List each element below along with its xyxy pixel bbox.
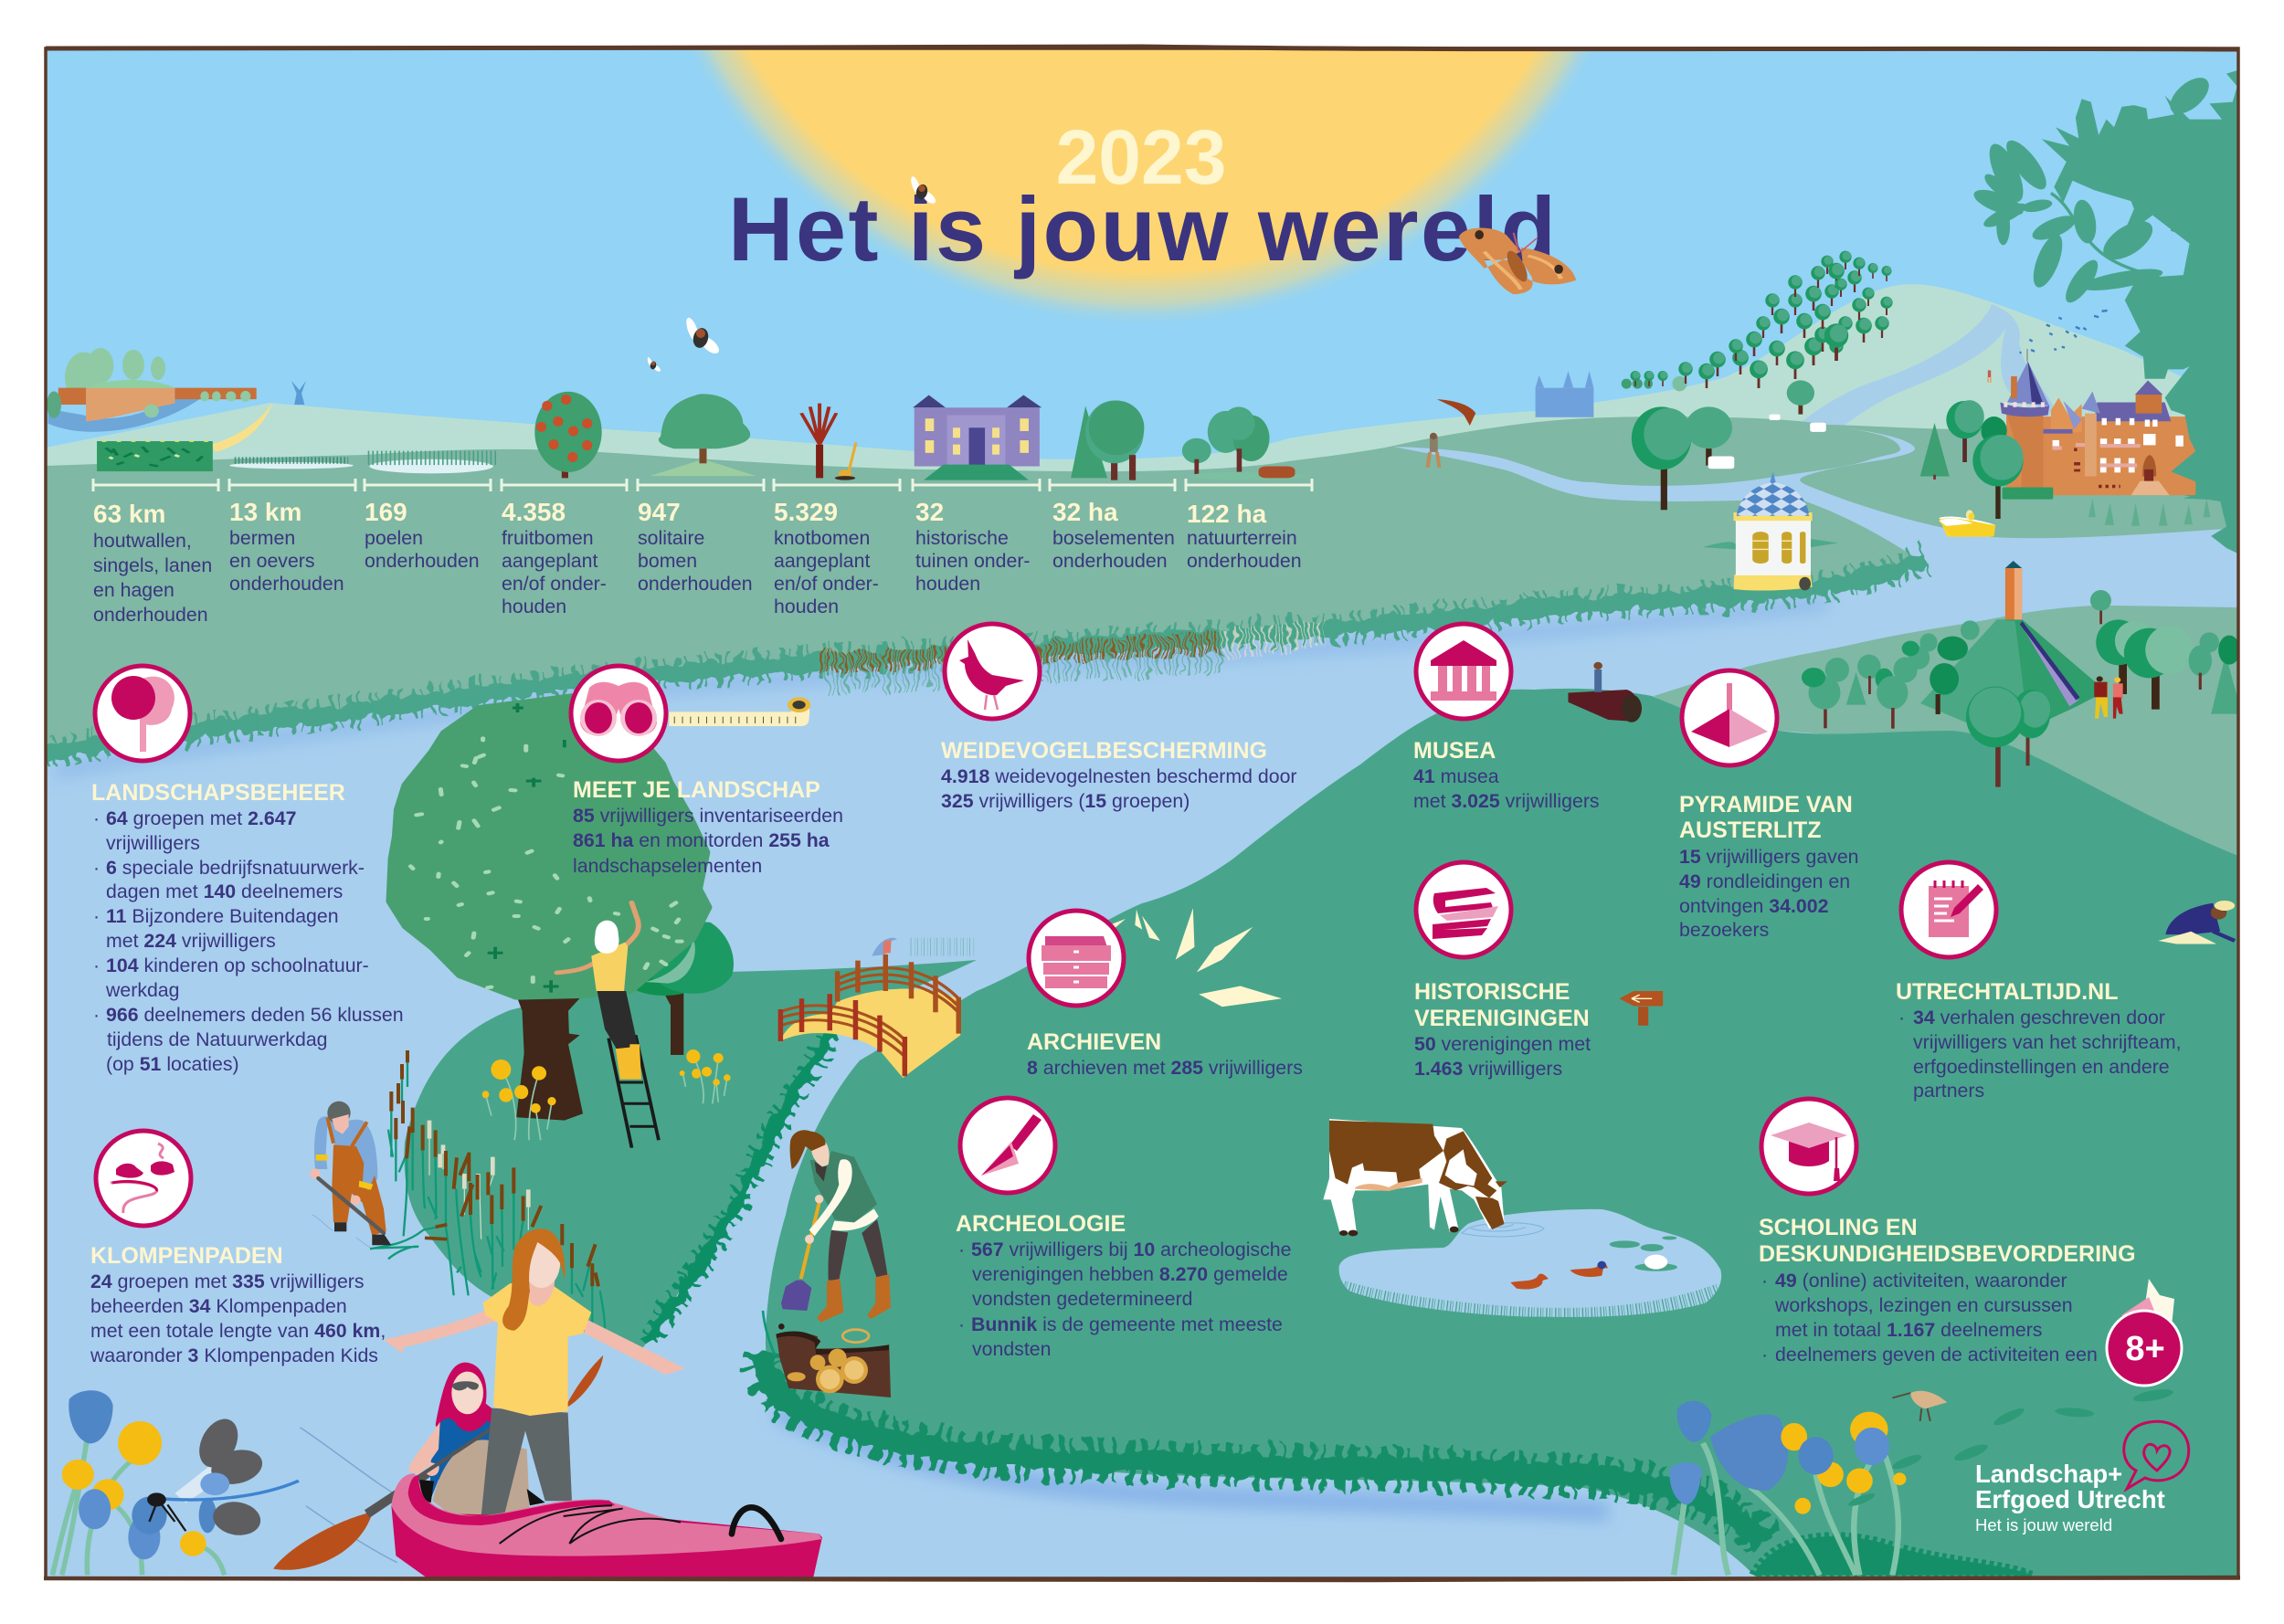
text: scholing: DESKUNDIGHEIDSBEVORDERING: [1759, 1241, 2136, 1267]
stat: bermen: 13 km: [229, 498, 301, 526]
standing kayaker: [384, 1229, 685, 1516]
text: historische verenigingen: 50 verenigingen met: [1414, 1033, 1591, 1055]
wader: [310, 1102, 447, 1259]
text: landschapsbeheer: 11 Bijzondere Buitendagen: [106, 905, 339, 927]
stat: houtwallen: singels, lanen: [93, 554, 212, 576]
text: scholing: 49 (online) activiteiten, waaronder: [1775, 1270, 2067, 1292]
kayak: [391, 1473, 822, 1578]
text: landschapsbeheer: 64 groepen met 2.647: [106, 807, 296, 829]
left flowers: [52, 1390, 225, 1575]
text: weidevogelbescherming: WEIDEVOGELBESCHERMING: [941, 738, 1267, 764]
stat: solitaire bomen: [638, 498, 753, 595]
text: utrechtaltijd: vrijwilligers van het schrijfteam,: [1913, 1031, 2182, 1053]
paddle: [273, 1355, 603, 1570]
stat: boselementen: [1052, 498, 1175, 572]
stat: knotbomen: aangeplant: [774, 550, 870, 572]
front meadow: [46, 417, 1929, 758]
stat: solitaire bomen: solitaire: [638, 527, 704, 549]
icon: clogs: [96, 1131, 191, 1226]
text: utrechtaltijd: ·: [1898, 1007, 1905, 1028]
bank hedge: [46, 559, 1926, 754]
text: utrechtaltijd: [1896, 979, 2182, 1102]
text: pyramide: PYRAMIDE VAN: [1679, 792, 1853, 817]
sky: [48, 49, 2236, 459]
meadow trees: [1632, 406, 1732, 510]
stat: bermen: onderhouden: [229, 573, 344, 595]
text: archeologie: verenigingen hebben 8.270 gemelde: [972, 1263, 1288, 1285]
stat: fruitbomen: aangeplant: [502, 550, 597, 572]
text: meet je landschap: 861 ha en monitorden 255 ha: [573, 829, 830, 851]
text: landschapsbeheer: met 224 vrijwilligers: [106, 930, 276, 952]
stat: solitaire bomen: 947: [638, 498, 681, 526]
trees near castle: [1920, 400, 2053, 519]
path: [211, 403, 272, 452]
fruit tree: [534, 392, 602, 478]
icon: mortarboard: [1761, 1099, 1856, 1194]
windmill: [291, 381, 306, 405]
right flowers: [1670, 1401, 1906, 1575]
foliage over castle: [2171, 382, 2247, 501]
text: landschapsbeheer: dagen met 140 deelnemers: [106, 881, 343, 902]
text: historische verenigingen: 1.463 vrijwilligers: [1414, 1058, 1562, 1080]
text: klompenpaden: KLOMPENPADEN: [90, 1243, 283, 1269]
shorebird: [1892, 1391, 1947, 1421]
text: meet je landschap: 85 vrijwilligers inventariseerden: [573, 805, 843, 827]
text: pyramide: AUSTERLITZ: [1679, 817, 1822, 843]
river branch: [1394, 431, 1929, 563]
big foliage silhouette: [1971, 68, 2247, 558]
big land: [766, 689, 2238, 1580]
stat: historische tuinen: historische: [915, 527, 1009, 549]
icon: pyramid: [1682, 670, 1777, 765]
icon: trowel: [960, 1098, 1055, 1193]
stat: boselementen: 32 ha: [1052, 498, 1118, 526]
text: pyramide: 15 vrijwilligers gaven: [1679, 846, 1859, 868]
text: klompenpaden: waaronder 3 Klompenpaden Kids: [90, 1345, 378, 1366]
poelen verge: [229, 460, 354, 469]
stat rulers: [93, 479, 1312, 491]
stat: knotbomen: knotbomen: [774, 527, 870, 549]
stat: houtwallen: onderhouden: [93, 604, 208, 626]
icon: landschapsbeheer tree: [95, 666, 190, 761]
archaeologist: [781, 1130, 891, 1323]
text: pyramide: 49 rondleidingen en: [1679, 870, 1850, 892]
text: archeologie: 567 vrijwilligers bij 10 archeologische: [971, 1239, 1291, 1260]
stat: boselementen: boselementen: [1052, 527, 1175, 549]
pyramid hill: [1654, 606, 2238, 863]
fort: [47, 348, 257, 432]
text: historische verenigingen: [1414, 979, 1591, 1080]
kneeling gardener: [2158, 901, 2235, 944]
stat: historische tuinen: 32: [915, 498, 944, 526]
text: utrechtaltijd: partners: [1913, 1080, 1984, 1102]
solitary tree: [650, 394, 756, 476]
stat: natuurterrein: [1187, 500, 1302, 572]
text: archeologie: vondsten: [972, 1338, 1051, 1360]
pond reeds: [368, 458, 497, 473]
text: historische verenigingen: HISTORISCHE: [1414, 979, 1570, 1005]
text: landschapsbeheer: werkdag: [105, 979, 179, 1001]
stat: houtwallen: houtwallen,: [93, 530, 192, 552]
stat: houtwallen: en hagen: [93, 579, 174, 601]
icon: books: [1416, 862, 1511, 957]
stat: knotbomen: [774, 498, 879, 617]
stat: knotbomen: houden: [774, 596, 839, 617]
text: archeologie: [956, 1211, 1291, 1360]
stat: boselementen: onderhouden: [1052, 550, 1168, 572]
bos trees: [1071, 400, 1144, 480]
text: weidevogelbescherming: 325 vrijwilligers (15 groepen): [941, 790, 1190, 812]
sun: [695, 49, 1588, 320]
text: scholing: workshops, lezingen en cursussen: [1774, 1294, 2073, 1316]
title: [728, 114, 1556, 279]
text: landschapsbeheer: tijdens de Natuurwerkdag: [107, 1028, 328, 1050]
signpost: [1619, 991, 1663, 1026]
knotted tree: [801, 404, 856, 480]
light hills: [48, 284, 2185, 471]
big tree: [391, 697, 976, 1148]
bottom bush: [1754, 1536, 2031, 1575]
text: weidevogelbescherming: 4.918 weidevogelnesten beschermd door: [941, 765, 1297, 787]
text: meet je landschap: [573, 777, 843, 877]
text: musea: 41 musea: [1413, 765, 1499, 787]
stat: knotbomen: 5.329: [774, 498, 838, 526]
icon: notepad: [1901, 862, 1996, 957]
rating badge 8+: 8+: [2125, 1330, 2165, 1368]
text: scholing: met in totaal 1.167 deelnemers: [1775, 1319, 2042, 1341]
text: historische verenigingen: VERENIGINGEN: [1414, 1006, 1590, 1031]
stat: fruitbomen: houden: [502, 596, 566, 617]
soil and coins: [763, 1311, 891, 1397]
text: landschapsbeheer: (op 51 locaties): [106, 1053, 239, 1075]
text: archieven: [1027, 1029, 1303, 1079]
text: meet je landschap: MEET JE LANDSCHAP: [573, 777, 820, 803]
poplars: [2088, 499, 2210, 526]
text: archeologie: Bunnik is de gemeente met meeste: [971, 1313, 1283, 1335]
text: klompenpaden: met een totale lengte van 460 km,: [90, 1320, 386, 1342]
bees in sky: [647, 316, 722, 373]
stat: historische tuinen: [915, 498, 1031, 595]
text: scholing: deelnemers geven de activiteiten een: [1775, 1344, 2098, 1366]
logo: Erfgoed Utrecht: [1975, 1485, 2165, 1513]
stat: bermen: [229, 498, 344, 595]
water: [46, 475, 2238, 1580]
grass on far bank: [911, 920, 976, 975]
stat: houtwallen: 63 km: [93, 500, 165, 528]
text: klompenpaden: [90, 1243, 386, 1366]
stat: historische tuinen: tuinen onder-: [915, 550, 1031, 572]
seated kayaker: [408, 1363, 530, 1519]
text: landschapsbeheer: LANDSCHAPSBEHEER: [91, 780, 345, 806]
landing log and walker: [1568, 662, 1642, 722]
historic mansion: [913, 395, 1042, 480]
boat: [1939, 512, 1995, 537]
archive papers: [1142, 908, 1282, 1007]
logo: [1975, 1421, 2189, 1534]
blue castle: [1536, 371, 1593, 417]
trees at ha-ends: [1089, 400, 1306, 480]
text: landschapsbeheer: ·: [93, 1004, 100, 1026]
text: landschapsbeheer: ·: [93, 905, 100, 927]
hiker: [1988, 370, 1991, 383]
text: pyramide: ontvingen 34.002: [1679, 895, 1828, 917]
bridge: [780, 954, 960, 1078]
text: utrechtaltijd: erfgoedinstellingen en andere: [1913, 1056, 2170, 1078]
text: archeologie: ·: [958, 1239, 965, 1260]
text: scholing: SCHOLING EN: [1759, 1215, 1918, 1240]
text: landschapsbeheer: [91, 780, 404, 1075]
text: klompenpaden: 24 groepen met 335 vrijwilligers: [90, 1271, 365, 1292]
measuring tape: [669, 697, 810, 726]
stat: poelen: [365, 498, 480, 572]
text: klompenpaden: beheerden 34 Klompenpaden: [90, 1295, 347, 1317]
stat: fruitbomen: [502, 498, 607, 617]
text: landschapsbeheer: ·: [93, 857, 100, 879]
stat: historische tuinen: houden: [915, 573, 980, 595]
pyramid of Austerlitz scene: [1802, 561, 2242, 787]
stat: solitaire bomen: bomen: [638, 550, 697, 572]
paddle shaft: [365, 1429, 491, 1512]
boat: [1939, 510, 1996, 537]
small trees: [1622, 376, 1814, 415]
logo: Het is jouw wereld: [1975, 1515, 2112, 1534]
dragonfly: [147, 1415, 299, 1540]
walker: [1428, 433, 1439, 468]
rating badge 8+: [2107, 1279, 2182, 1386]
text: weidevogelbescherming: [941, 738, 1297, 812]
water lines: [301, 1428, 416, 1563]
stat: knotbomen: en/of onder-: [774, 573, 879, 595]
stat: bermen: en oevers: [229, 550, 315, 572]
stat: natuurterrein: 122 ha: [1187, 500, 1267, 528]
text: meet je landschap: landschapselementen: [573, 855, 762, 877]
text: archeologie: vondsten gedetermineerd: [972, 1288, 1193, 1310]
birds: [2020, 311, 2108, 353]
yellow flowers: [482, 1049, 731, 1140]
stat: fruitbomen: en/of onder-: [502, 573, 607, 595]
island: [404, 960, 977, 1349]
footprints: [1846, 1387, 2174, 1508]
text: musea: met 3.025 vrijwilligers: [1413, 790, 1600, 812]
text: pyramide: bezoekers: [1679, 919, 1769, 941]
swallow: [1437, 399, 1475, 426]
hillside forest: [1630, 251, 1893, 388]
text: scholing: ·: [1761, 1270, 1768, 1292]
hedge block: [97, 441, 213, 471]
text: archieven: ARCHIEVEN: [1027, 1029, 1161, 1055]
pavilion: [1703, 471, 1838, 591]
stat: poelen: 169: [365, 498, 407, 526]
lower river shadow: [777, 1411, 1608, 1512]
right meadow: [1800, 425, 2238, 538]
text: archeologie: ARCHEOLOGIE: [956, 1211, 1126, 1237]
cows: [1708, 415, 1826, 469]
stat: solitaire bomen: onderhouden: [638, 573, 753, 595]
cattails: [388, 1050, 605, 1336]
bank shadow: [55, 603, 1827, 772]
text: archeologie: ·: [958, 1313, 965, 1335]
reeds along bank: [820, 635, 1325, 680]
text: musea: MUSEA: [1413, 738, 1496, 764]
text: scholing: [1759, 1215, 2136, 1366]
pond, cow, ducks: [1323, 1119, 1721, 1322]
stat: poelen: onderhouden: [365, 550, 480, 572]
text: utrechtaltijd: UTRECHTALTIJD.NL: [1896, 979, 2118, 1005]
stat: natuurterrein: natuurterrein: [1187, 527, 1297, 549]
title: Het is jouw wereld: [728, 178, 1556, 279]
text: landschapsbeheer: ·: [93, 954, 100, 976]
castle: [2000, 349, 2195, 495]
icon: museum: [1416, 624, 1511, 719]
stat: bermen: bermen: [229, 527, 295, 549]
icon: meadow bird: [945, 624, 1040, 719]
lower hedge: [766, 1352, 1763, 1544]
title: 2023: [1056, 114, 1226, 200]
climbing volunteer: [556, 902, 659, 1148]
icon: archive: [1029, 911, 1124, 1006]
stat: poelen: poelen: [365, 527, 423, 549]
stat: natuurterrein: onderhouden: [1187, 550, 1302, 572]
text: landschapsbeheer: 104 kinderen op schoolnatuur-: [106, 954, 369, 976]
text: landschapsbeheer: ·: [93, 807, 100, 829]
kingfisher: [872, 938, 897, 956]
stat: fruitbomen: fruitbomen: [502, 527, 594, 549]
text: landschapsbeheer: vrijwilligers: [106, 832, 200, 854]
text: utrechtaltijd: 34 verhalen geschreven door: [1913, 1007, 2165, 1028]
text: musea: [1413, 738, 1600, 812]
text: archieven: 8 archieven met 285 vrijwilligers: [1027, 1057, 1303, 1079]
bee on title: [909, 175, 937, 206]
stat: fruitbomen: 4.358: [502, 498, 566, 526]
island hedge: [644, 1032, 833, 1343]
logo: Landschap+: [1975, 1460, 2122, 1488]
text: landschapsbeheer: 6 speciale bedrijfsnatuurwerk-: [106, 857, 365, 879]
illustrations left top: [47, 348, 1144, 480]
text: landschapsbeheer: 966 deelnemers deden 56 klussen: [106, 1004, 404, 1026]
text: pyramide: [1679, 792, 1859, 941]
light blue streams on hill: [1802, 304, 2054, 426]
moth: [1459, 228, 1576, 294]
text: scholing: ·: [1761, 1344, 1768, 1366]
icon: binoculars: [571, 666, 666, 761]
stat: houtwallen: [93, 500, 212, 626]
